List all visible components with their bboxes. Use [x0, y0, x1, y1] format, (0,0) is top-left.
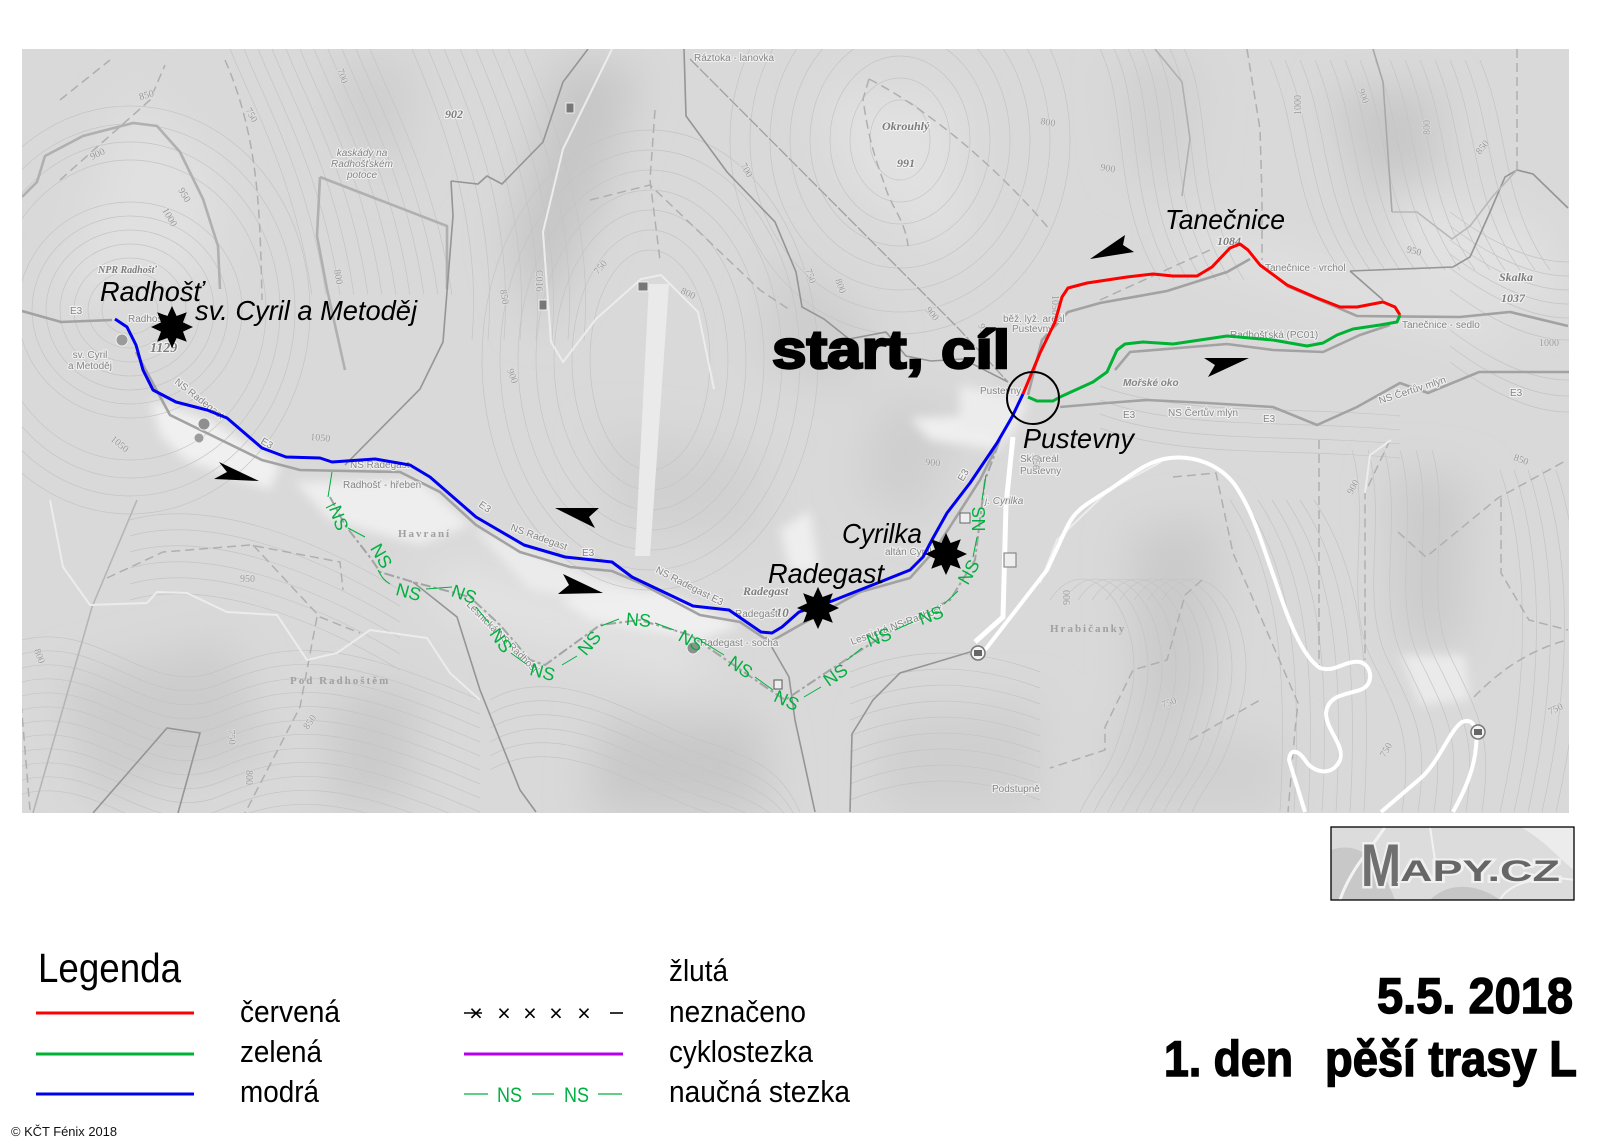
map labels: Havraní [398, 528, 451, 540]
map labels: 900 [1099, 162, 1116, 176]
map labels: NS Radegast E3 [654, 565, 725, 609]
legend: neznačeno: × [577, 1000, 591, 1026]
NS educational trail (green): NS [574, 627, 605, 659]
map labels: Tanečnice - vrchol [1265, 263, 1346, 274]
map labels: Radhošťská (PC01) [1230, 330, 1318, 341]
map labels: potoce [346, 170, 377, 181]
map labels: 1084 [1217, 234, 1241, 248]
route: green [1028, 315, 1400, 401]
NS educational trail (green): NS [394, 579, 423, 605]
map labels: C016 [533, 270, 544, 292]
map labels: Mořské oko [1123, 378, 1179, 389]
map labels: NS Radegast [509, 522, 569, 553]
map labels: 750 [1378, 741, 1395, 760]
map labels: Radegast - socha [700, 638, 779, 649]
legend: žlutá: žlutá [669, 953, 729, 988]
NS educational trail (green): NS [325, 503, 352, 533]
white main road [975, 437, 1476, 812]
map labels: 900 [504, 367, 520, 385]
NS educational trail (green): NS [771, 686, 802, 715]
map labels: NS Čertův mlýn [1168, 406, 1238, 419]
NS educational trail (green): NS [969, 506, 989, 532]
map labels: 700 [737, 161, 754, 179]
forest paths [20, 49, 1568, 813]
map labels: Hrabičanky [1050, 623, 1126, 635]
map labels: E3 [1510, 388, 1523, 399]
map labels: NS Čertův mlýn [1377, 373, 1448, 407]
ridge roads [22, 259, 1569, 642]
map labels: E3 [258, 436, 275, 452]
place labels: Pustevny [1023, 423, 1136, 454]
map labels: Radegast [735, 609, 778, 620]
hatched boundary lines [22, 123, 447, 370]
cable car line [690, 59, 1008, 382]
ski slope [635, 284, 669, 556]
NS educational trail (green): NS [916, 602, 946, 629]
map labels: 750 [592, 258, 610, 277]
place labels: Cyrilka [842, 518, 922, 549]
map labels: 800 [31, 647, 47, 665]
map labels: E3 [1123, 410, 1136, 421]
NS educational trail (green): NS [675, 626, 707, 656]
map labels: 950 [975, 322, 991, 340]
map labels: Pustevny [1020, 466, 1061, 477]
star: Radegast [797, 587, 839, 629]
NS educational trail (green): NS [954, 556, 984, 588]
map labels: 950 [1032, 455, 1043, 470]
legend: neznačeno: × [469, 1000, 483, 1026]
legend: naučná stezka: naučná stezka [669, 1074, 851, 1109]
map labels: 950 [175, 186, 192, 204]
route: blue [115, 319, 1023, 633]
map labels: 850 [1512, 452, 1530, 468]
copyright: © KČT Fénix 2018 [11, 1124, 117, 1139]
place labels: Radegast [768, 558, 885, 589]
map labels: Radegast [742, 584, 789, 598]
map labels: Ski areál [1020, 454, 1059, 465]
legend: neznačeno: × [523, 1000, 537, 1026]
map symbols [116, 103, 1485, 739]
route: red [1023, 244, 1400, 394]
national trail dash-dot route [330, 440, 1000, 700]
map labels: 1050 [108, 434, 130, 455]
star: Cyrilka [925, 533, 967, 575]
map labels: 110 [770, 605, 789, 620]
NS educational trail (green) [325, 472, 989, 715]
map labels: běž. lyž. areál [1003, 314, 1065, 325]
map labels: 1050 [310, 432, 331, 445]
Mapy.cz logo: APY.CZ [1400, 855, 1560, 888]
map labels: 1037 [1501, 291, 1526, 305]
place labels: Tanečnice [1165, 204, 1285, 235]
map labels: 900 [1345, 478, 1362, 496]
map labels: E3 [476, 499, 493, 516]
map labels: NS Radegast [172, 377, 226, 422]
map labels: 1129 [150, 341, 177, 356]
map labels: NPR Radhošť [97, 265, 158, 276]
map labels: 800 [679, 286, 697, 302]
NS educational trail (green): NS [449, 581, 479, 608]
start label: start, cíl [772, 320, 1010, 380]
map labels [31, 53, 1565, 795]
map labels: Skalka [1499, 270, 1533, 284]
map labels: Lesnická NS Radhošť [849, 604, 945, 648]
legend: neznačeno [464, 994, 806, 1029]
map labels: 900 [1062, 590, 1073, 605]
NS educational trail (green): NS [625, 609, 652, 631]
map labels: Radhošťském [331, 159, 393, 170]
NS educational trail (green): NS [724, 652, 756, 682]
map labels: a Metoděj [68, 361, 112, 372]
direction arrows [214, 235, 1249, 594]
map labels: Pustevny [980, 386, 1021, 397]
map labels: j. Cyrilka [983, 496, 1024, 507]
place labels: sv. Cyril a Metoděj [195, 295, 418, 326]
map labels: 1050 [1049, 295, 1060, 315]
map labels: 950 [1405, 244, 1423, 259]
map labels: 850 [497, 289, 510, 305]
grey forest roads [33, 49, 1568, 813]
NS educational trail (green): NS [486, 625, 516, 657]
map labels: 1000 [1293, 95, 1304, 115]
legend: cyklostezka: cyklostezka [669, 1034, 814, 1069]
Mapy.cz logo [1331, 827, 1574, 900]
NS educational trail (green): NS [820, 660, 852, 690]
panel: topographic map [22, 49, 1569, 813]
map labels: 1000 [159, 206, 179, 229]
place labels [100, 204, 1285, 589]
map labels: 850 [138, 88, 155, 103]
map labels: 950 [240, 574, 255, 585]
map labels: altán Cyrilka [885, 547, 940, 558]
NS educational trail (green): NS [864, 624, 894, 651]
map labels: Tanečnice - sedlo [1402, 320, 1480, 331]
map labels: Pustevny [1012, 324, 1053, 335]
map labels: 750 [1547, 701, 1565, 718]
start/finish circle [1007, 372, 1059, 424]
map contour lines [22, 49, 1569, 813]
title: day and route: pěší trasy L [1325, 1031, 1577, 1087]
star: sv. Cyril a Metoděj [151, 306, 193, 348]
map labels: 750 [802, 267, 818, 285]
map labels: 800 [1039, 116, 1056, 130]
title: day and route [1164, 1031, 1577, 1087]
legend: modrá: modrá [240, 1074, 320, 1109]
map labels: sv. Cyril [73, 350, 107, 361]
map labels: 1000 [1539, 338, 1559, 349]
map labels: Radhošť [128, 314, 166, 325]
map labels: 900 [89, 146, 107, 163]
map labels: kaskády na [337, 148, 388, 159]
map labels: 800 [1422, 120, 1433, 135]
map labels: Okrouhlý [882, 119, 930, 133]
place labels: Radhošť [100, 276, 206, 307]
map labels: 850 [301, 713, 319, 732]
map labels: 800 [243, 770, 254, 785]
map labels: 902 [445, 107, 463, 121]
map labels: 750 [225, 729, 237, 745]
legend: naučná stezka [464, 1074, 851, 1109]
legend: zelená: zelená [240, 1034, 323, 1069]
map labels: 991 [897, 156, 915, 170]
map labels: 800 [331, 269, 344, 285]
cycle trails [50, 49, 1391, 700]
legend: neznačeno: × [497, 1000, 511, 1026]
map labels: E3 [582, 548, 595, 559]
NS educational trail (green): NS [528, 659, 557, 685]
map labels: Lesnická NS Radhošť [464, 599, 541, 676]
legend: naučná stezka: NS [564, 1084, 589, 1107]
map hillshade [60, 60, 1560, 812]
map labels: 900 [923, 305, 941, 323]
map labels: 700 [334, 67, 350, 85]
map labels: E3 [956, 467, 972, 484]
legend: neznačeno: × [549, 1000, 563, 1026]
map labels: 750 [1160, 695, 1178, 711]
map labels: Pod Radhoštěm [290, 675, 390, 687]
legend: červená: červená [240, 994, 341, 1029]
map labels: E3 [70, 306, 83, 317]
NS educational trail (green): NS [366, 540, 396, 572]
map labels: 850 [1474, 138, 1492, 157]
legend: neznačeno: neznačeno [669, 994, 806, 1029]
map labels: NS Radegast [350, 460, 410, 471]
legend heading: Legenda [38, 945, 181, 991]
map labels: 900 [1355, 87, 1371, 105]
map labels: 900 [925, 457, 941, 469]
Mapy.cz logo: M [1361, 832, 1401, 899]
map labels: Podstupně [992, 784, 1040, 795]
map labels: 800 [832, 277, 848, 295]
map labels: Radhošť - hřeben [343, 480, 421, 491]
title: day and route: 1. den [1164, 1031, 1293, 1087]
map labels: E3 [1263, 414, 1276, 425]
title: date: 5.5. 2018 [1377, 968, 1573, 1024]
legend [36, 945, 851, 1109]
legend: naučná stezka: NS [497, 1084, 522, 1107]
map labels: 750 [242, 106, 259, 124]
map labels: Ráztoka - lanovka [694, 53, 774, 64]
